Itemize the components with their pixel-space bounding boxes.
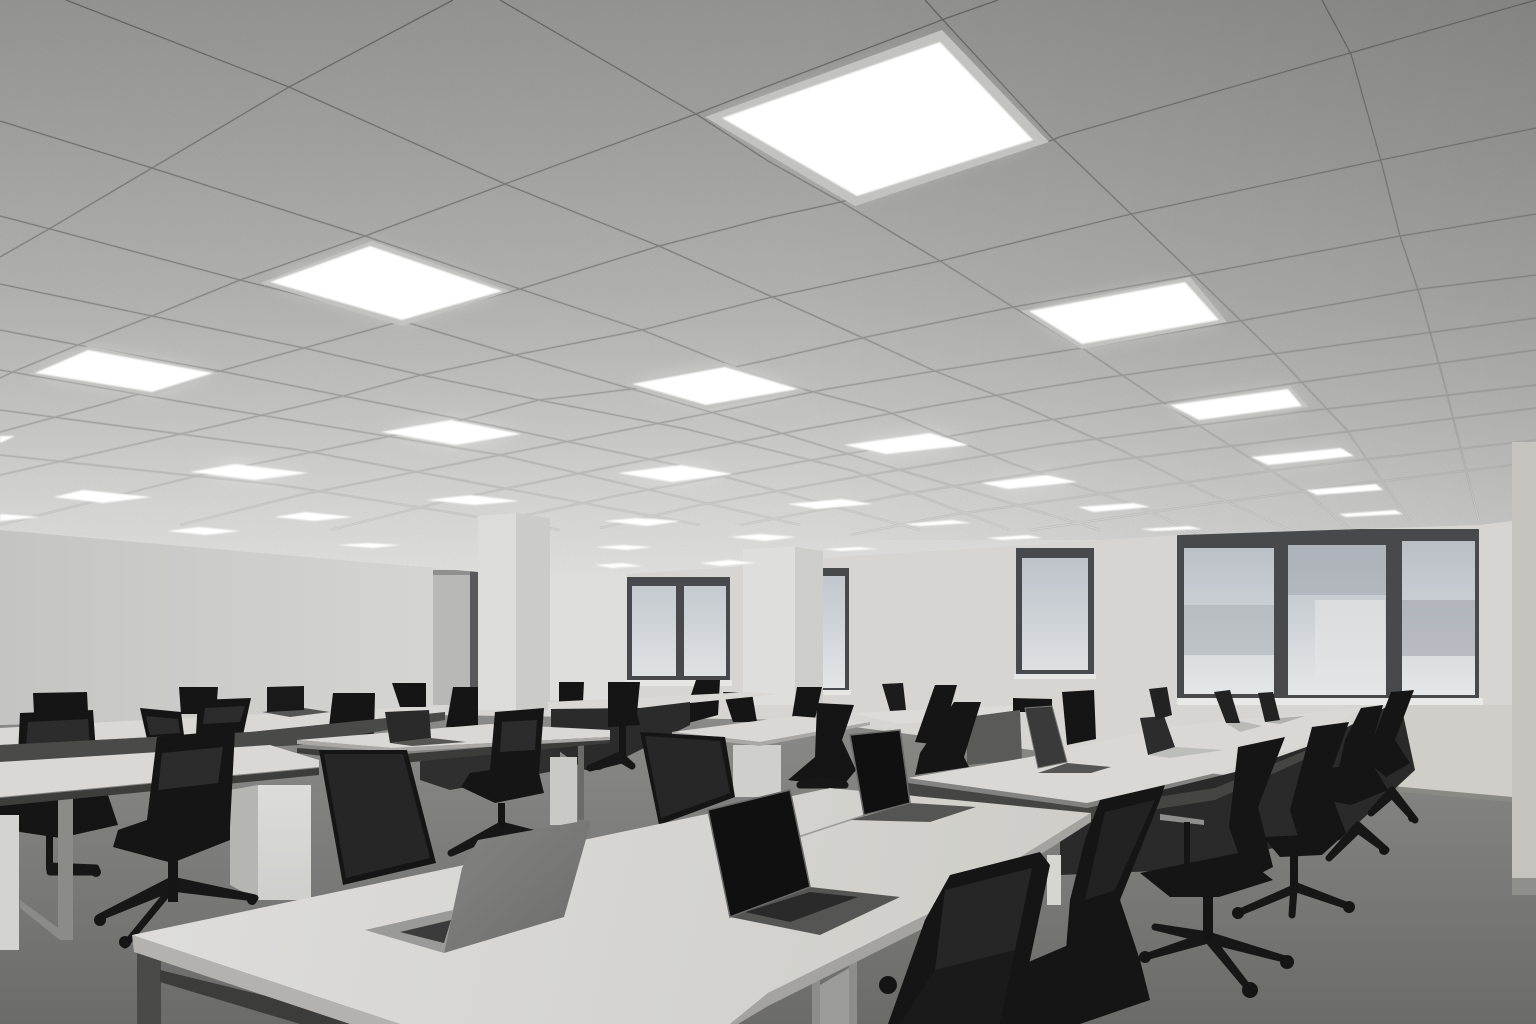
dark shadow under second row desk [1060,700,1415,875]
left front desk [0,745,319,950]
window: back left [625,577,732,686]
doorway [433,570,478,705]
far centre desk [548,692,780,710]
left pedestal [0,815,19,950]
laptop [385,710,466,746]
light glow halos [35,42,1354,489]
chair [1365,690,1416,822]
ceiling panel frames [28,30,1309,423]
right back chairs [915,685,1096,775]
chair: foreground [879,785,1165,1024]
window: beside column [823,568,851,695]
column: left [478,513,550,710]
centre right desk [672,716,870,797]
ceiling [0,0,1536,580]
desk seam [798,815,865,837]
pedestal [550,757,577,825]
far chairs row [33,680,822,727]
laptop [1025,706,1111,773]
far left desk [0,706,445,745]
column heads over ceiling [478,513,823,576]
right foreground pillar [1512,442,1536,895]
leg and rail [137,945,857,1024]
under-desk dark legs [420,745,560,790]
laptop [1140,716,1224,758]
under-desk dark frames [0,712,445,877]
pedestal [230,785,311,900]
chair: centre desk [451,708,544,853]
carpet floor [0,690,1536,1024]
far left desks and chairs [0,680,1030,877]
chair: mesh back right of centre [640,732,735,825]
centre left desk [297,710,610,825]
column: centre [743,547,823,705]
chair behind centre right desk [788,703,856,787]
laptop: far right [882,683,906,711]
laptop [1214,690,1262,732]
chair: large mesh back behind main desk [319,750,436,885]
dark frames under far centre desk [551,702,690,770]
row of mid left chairs [18,693,375,755]
far right small desk [851,705,1030,724]
underside [0,768,319,806]
left wall [0,528,433,725]
chair [1139,737,1294,998]
pedestal beneath right edge [1047,855,1061,905]
desk top [0,745,319,797]
underside [908,748,1312,820]
laptop: rear view [365,820,590,953]
back right chairs row [1139,690,1416,998]
window: large triple pane [1177,529,1483,705]
legs [578,738,584,820]
second row desk on right [908,687,1360,820]
chair: mesh left [94,730,257,948]
chair [1232,722,1355,919]
laptop: mid desk [850,730,976,822]
chair [1320,705,1389,858]
main front desk [132,788,1091,1024]
desk top [908,708,1360,803]
laptop [1149,687,1172,720]
desk top [132,788,1091,1024]
laptops on the second row [1025,687,1305,773]
desk top [297,724,610,748]
centre back chair with wheels [590,682,640,768]
edge thickness [132,935,400,1024]
laptop [1258,692,1305,724]
frame leg [20,793,73,940]
laptop: far left [262,686,330,717]
laptop: open screen [708,790,900,935]
ceiling light panels [0,42,1403,568]
window: middle [1014,548,1096,679]
back and right walls [433,520,1512,802]
